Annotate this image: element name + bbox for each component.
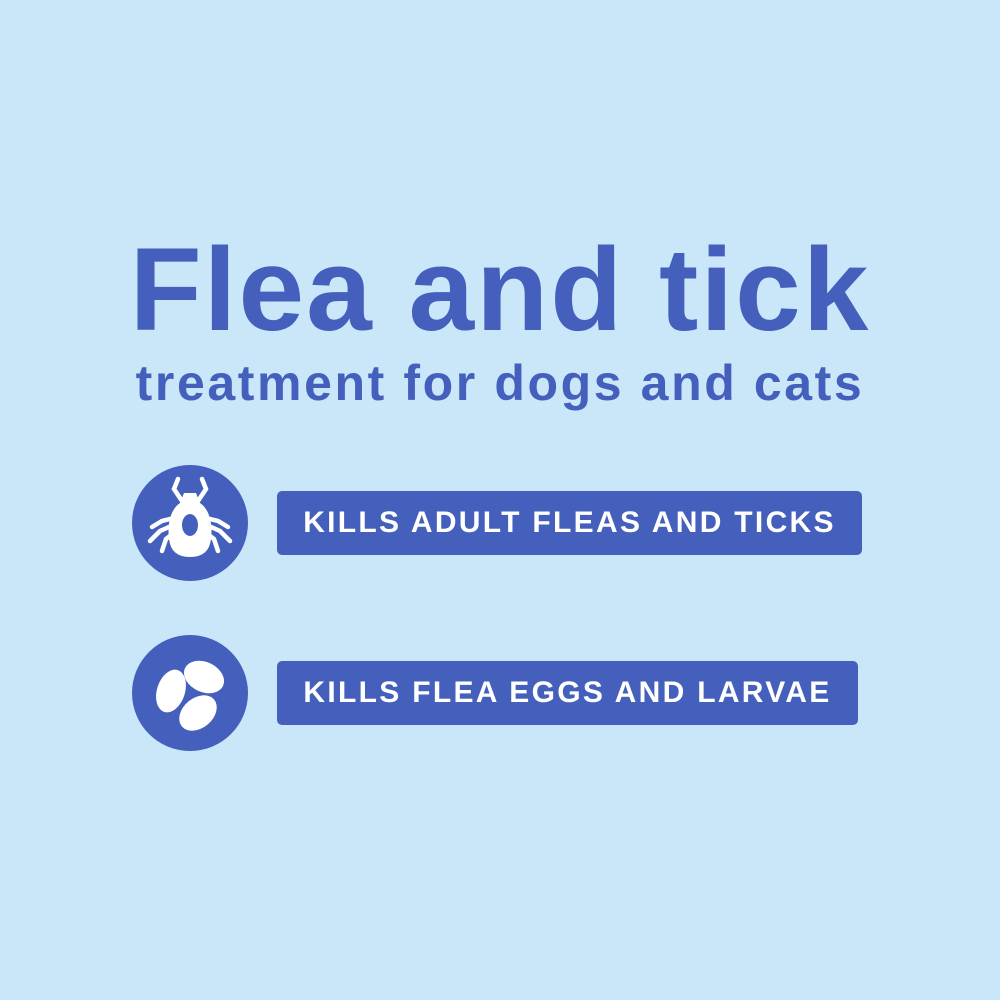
pill: adult fleas: KILLS ADULT FLEAS AND TICKS bbox=[303, 506, 836, 539]
title: Flea and tick bbox=[130, 224, 870, 356]
subtitle: treatment for dogs and cats bbox=[136, 355, 864, 411]
pill: eggs and larvae bbox=[277, 661, 858, 725]
icon: eggs bbox=[132, 635, 248, 751]
pill: adult fleas bbox=[277, 491, 862, 555]
icon: tick bbox=[132, 465, 248, 581]
pill: eggs and larvae: KILLS FLEA EGGS AND LARVAE bbox=[303, 676, 832, 709]
